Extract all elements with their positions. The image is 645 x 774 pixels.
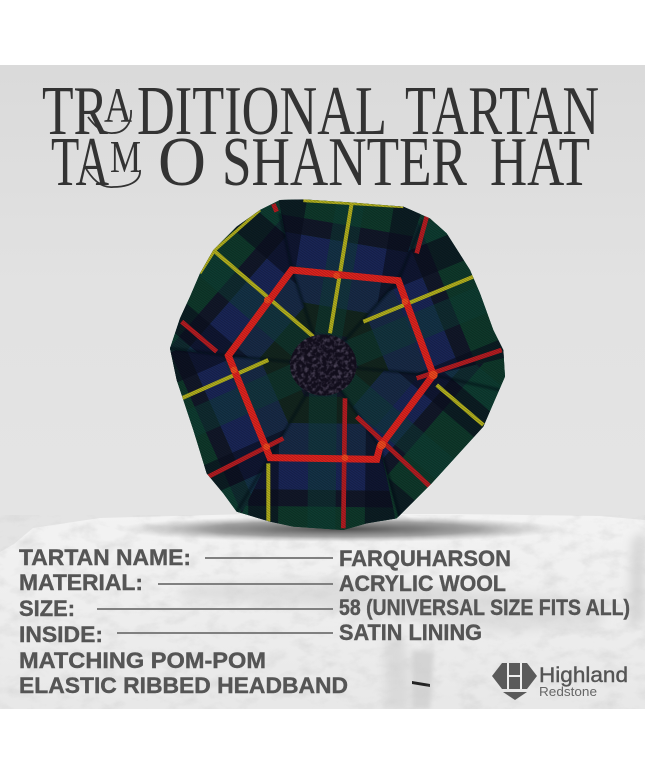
hat shadow on stone <box>115 516 565 542</box>
tartan hat <box>170 199 505 530</box>
red radial stripes <box>182 204 502 528</box>
title line 2: O <box>158 124 206 201</box>
spec: size: SIZE: <box>19 596 75 621</box>
pom-pom <box>288 333 358 397</box>
title line 2: M <box>110 131 141 182</box>
red octagon stripe <box>228 270 433 459</box>
spec: size <box>19 595 630 621</box>
spec: inside: INSIDE: <box>19 622 103 647</box>
yellow stripes <box>182 201 483 522</box>
title line 2 <box>51 124 590 201</box>
title line 1: TR <box>42 73 108 150</box>
logo subtitle: Redstone <box>539 684 597 699</box>
stone pedestal <box>0 514 645 709</box>
title line 1: A <box>104 77 132 133</box>
spec: tartan name <box>19 545 511 571</box>
logo icon <box>492 663 537 700</box>
spec: material: MATERIAL: <box>19 570 143 595</box>
title line 2: SHANTER <box>222 124 467 201</box>
wedge: upper left <box>170 200 312 362</box>
title line 1: DITIONAL <box>137 73 387 150</box>
wedge: lower right <box>353 358 505 517</box>
stripe crossing highlights <box>231 272 438 461</box>
twill weave texture <box>160 190 510 540</box>
title line 1 <box>42 73 599 150</box>
spec list <box>19 545 630 698</box>
spec: inside <box>19 620 482 647</box>
title line 2: HAT <box>490 124 590 201</box>
wedge: lower left <box>170 350 308 514</box>
wedge: upper right <box>344 222 504 374</box>
wedge fold shadows <box>170 213 500 517</box>
spec: material: ACRYLIC WOOL <box>339 571 506 596</box>
spec: material <box>19 570 506 596</box>
title line 2: TA <box>51 124 109 201</box>
wedge: bottom <box>236 391 396 530</box>
spec: tartan name: FARQUHARSON <box>339 546 511 571</box>
hat base <box>160 190 510 540</box>
logo wordmark: Highland <box>539 664 628 687</box>
spec: inside: SATIN LINING <box>339 620 482 645</box>
title <box>42 73 599 201</box>
logo: Highland Redstone <box>492 663 628 700</box>
spec: tartan name: TARTAN NAME: <box>19 545 191 570</box>
feature: pom-pom: MATCHING POM-POM <box>19 648 266 673</box>
feature: headband: ELASTIC RIBBED HEADBAND <box>19 673 348 698</box>
wedge: top <box>278 199 421 341</box>
